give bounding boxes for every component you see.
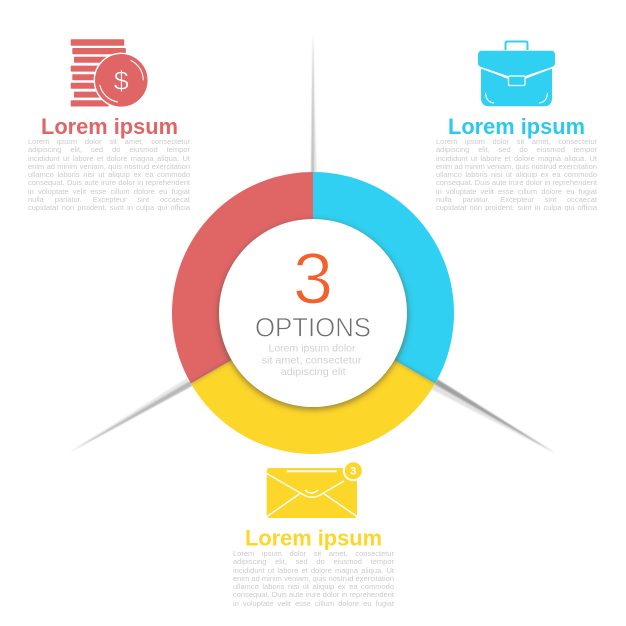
icon: coins (70, 39, 148, 107)
body text: in voluptate velit esse cillum dolore eu fugiat (233, 598, 394, 608)
body text (233, 549, 394, 608)
panel: red (28, 39, 190, 212)
body text: cupidatat non proident, sunt in culpa qui officia (436, 203, 597, 212)
icon: envelope: 3 (350, 466, 356, 478)
icon: briefcase (478, 40, 555, 106)
icon: coins: $ (114, 66, 129, 96)
body text: in voluptate velit esse cillum dolore eu fugiat (28, 186, 190, 196)
heading: Lorem ipsum (448, 114, 585, 139)
centre caption: Lorem ipsum dolor (268, 342, 356, 354)
body text: adipiscing elit, sed do eiusmod tempor (436, 145, 597, 154)
body text: incididunt ut labore et dolore magna aliqua. Ut (233, 566, 394, 574)
centre circle (219, 219, 407, 407)
body text (28, 137, 190, 212)
heading: Lorem ipsum (245, 526, 382, 551)
body text: consequat. Duis aute irure dolor in reprehenderit (233, 590, 394, 599)
body text: cupidatat non proident, sunt in culpa qui officia (28, 203, 190, 212)
centre caption (262, 342, 362, 378)
wedge shadow: right (431, 379, 555, 453)
body text: enim ad minim veniam, quis nostrud exercitation (28, 162, 190, 171)
body text: ullamco laboris nisi ut aliquip ex ea commodo (233, 582, 394, 591)
body text: enim ad minim veniam, quis nostrud exercitation (436, 162, 597, 171)
heading: Lorem ipsum (41, 114, 178, 139)
body text: adipiscing elit, sed do eiusmod tempor (233, 557, 394, 566)
body text: adipiscing elit, sed do eiusmod tempor (28, 145, 190, 154)
body text: ullamco laboris nisi ut aliquip ex ea commodo (436, 170, 597, 179)
body text: incididunt ut labore et dolore magna aliqua. Ut (28, 154, 190, 162)
body text: enim ad minim veniam, quis nostrud exercitation (233, 574, 394, 583)
body text: Lorem ipsum dolor sit amet, consectetur (28, 137, 190, 146)
panel: yellow (233, 462, 394, 608)
ring segment: blue (313, 172, 454, 384)
centre caption: adipiscing elit (281, 366, 346, 378)
body text: incididunt ut labore et dolore magna aliqua. Ut (436, 154, 597, 162)
centre caption: sit amet, consectetur (262, 354, 362, 366)
ring segment: yellow (191, 313, 435, 454)
panel: blue (436, 40, 597, 212)
wedge shadow: top (310, 33, 316, 174)
options word: OPTIONS (255, 312, 371, 342)
body text: Lorem ipsum dolor sit amet, consectetur (436, 137, 597, 146)
donut chart (74, 40, 552, 454)
body text (436, 137, 597, 212)
body text: nulla pariatur. Excepteur sint occaecat (28, 195, 190, 204)
body text: ullamco laboris nisi ut aliquip ex ea commodo (28, 170, 190, 179)
icon: envelope (266, 462, 362, 518)
body text: consequat. Duis aute irure dolor in reprehenderit (28, 178, 190, 187)
body text: nulla pariatur. Excepteur sint occaecat (436, 195, 597, 204)
ring segment: red (172, 172, 313, 384)
body text: Lorem ipsum dolor sit amet, consectetur (233, 549, 394, 558)
body text: consequat. Duis aute irure dolor in reprehenderit (436, 178, 597, 187)
body text: in voluptate velit esse cillum dolore eu fugiat (436, 186, 597, 196)
wedge shadow: left (70, 378, 192, 452)
number 3: 3 (293, 240, 333, 320)
